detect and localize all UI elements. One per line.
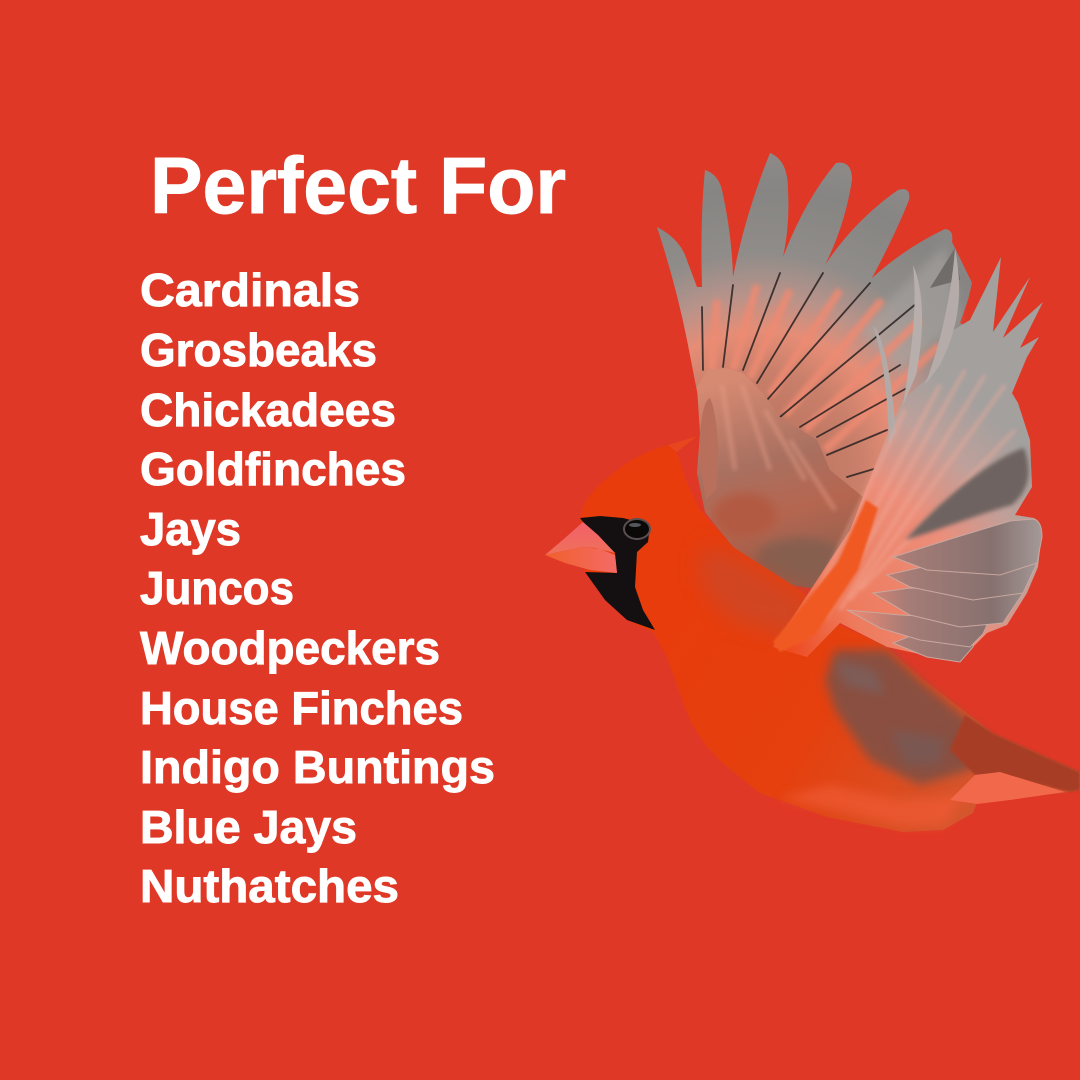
dark feather shadow	[930, 248, 960, 288]
bird list: Indigo Buntings	[140, 741, 495, 793]
bird list: Chickadees	[140, 384, 396, 436]
salmon streaks	[712, 285, 940, 450]
bird list: Nuthatches	[140, 860, 399, 912]
feather gaps	[702, 273, 917, 477]
back wing	[657, 153, 985, 520]
bird list: Blue Jays	[140, 801, 357, 853]
thin spikes	[873, 325, 896, 445]
bird list: Juncos	[140, 562, 294, 614]
dark primary feather	[905, 448, 1028, 540]
fan streaks	[800, 370, 1015, 630]
cardinal photo illustration	[545, 153, 1080, 832]
bird list	[140, 264, 495, 912]
bird list: Goldfinches	[140, 443, 406, 495]
grey-brown flank	[825, 650, 990, 785]
black face mask	[580, 516, 655, 630]
crest wisp	[668, 436, 697, 452]
title: Perfect For	[150, 141, 566, 230]
lower wing lobes	[847, 519, 1042, 662]
front wing	[773, 248, 1043, 662]
bird list: Grosbeaks	[140, 324, 377, 376]
bird list: Jays	[140, 503, 241, 555]
tail	[950, 715, 1080, 792]
body	[580, 445, 1080, 832]
neck shading	[700, 545, 810, 640]
eye	[623, 518, 651, 540]
leading edge	[773, 500, 878, 652]
lower body glow	[780, 785, 965, 826]
inner wing coverts	[697, 368, 880, 592]
beak	[545, 522, 617, 573]
bird list: House Finches	[140, 682, 463, 734]
bird list: Woodpeckers	[140, 622, 440, 674]
under-tail	[950, 772, 1065, 804]
lighter upper-right feathers	[860, 245, 960, 370]
bird list: Cardinals	[140, 264, 360, 316]
